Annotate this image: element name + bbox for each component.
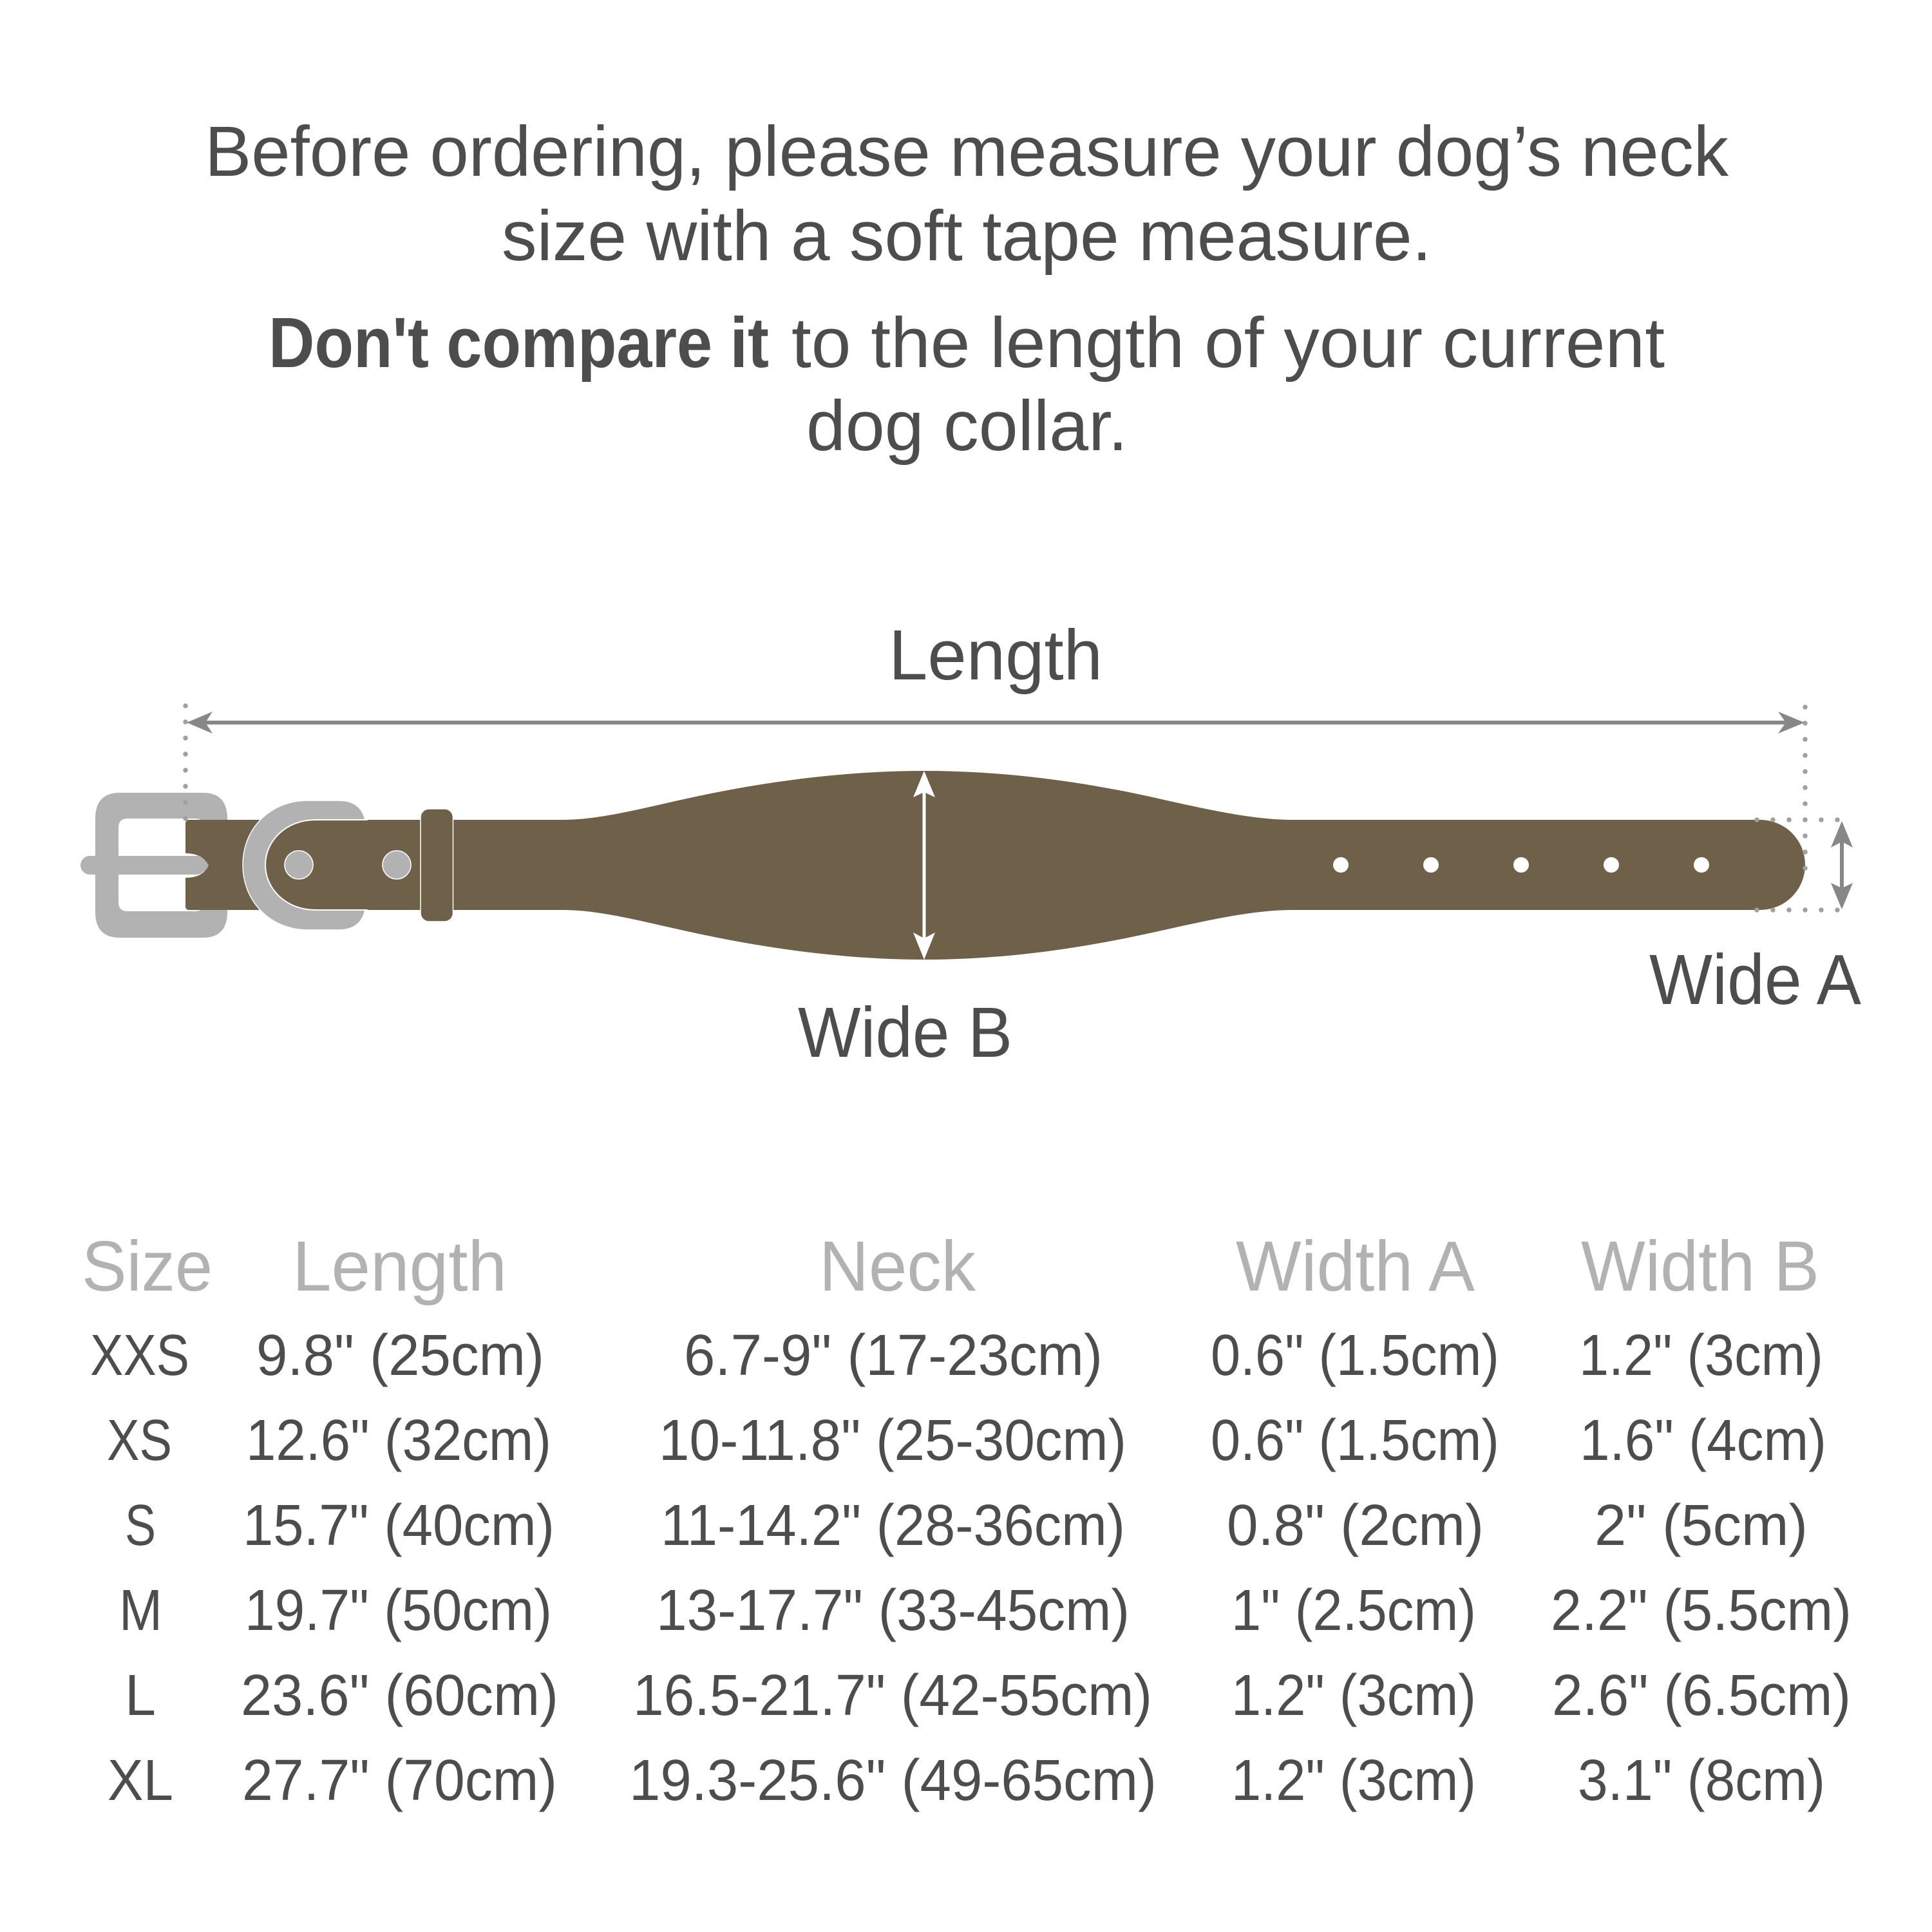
row S: 15.7" (40cm)	[243, 1493, 554, 1558]
row L: 1.2" (3cm)	[1231, 1663, 1476, 1728]
strap fold over ring	[265, 820, 367, 910]
row XXS: XXS	[90, 1323, 189, 1388]
icon: buckle frame	[95, 793, 227, 938]
header: size: Size	[82, 1227, 213, 1306]
header: width B: Width B	[1581, 1227, 1819, 1306]
row L	[125, 1663, 1851, 1728]
row XL: 27.7" (70cm)	[242, 1748, 557, 1813]
row XS: 10-11.8" (25-30cm)	[659, 1408, 1126, 1473]
header: width A: Width A	[1236, 1227, 1475, 1306]
table header row	[82, 1227, 1819, 1306]
row M	[119, 1578, 1852, 1643]
icon: rivet 1	[285, 851, 313, 879]
arrow: wide A	[1831, 821, 1853, 909]
row XXS: 6.7-9" (17-23cm)	[684, 1323, 1103, 1388]
row M: 13-17.7" (33-45cm)	[656, 1578, 1130, 1643]
row XL: 19.3-25.6" (49-65cm)	[629, 1748, 1157, 1813]
row XS: 0.6" (1.5cm)	[1211, 1408, 1499, 1473]
row M: M	[119, 1578, 162, 1643]
left dotted guide	[183, 706, 188, 819]
row M: 19.7" (50cm)	[245, 1578, 552, 1643]
row XXS	[90, 1323, 1823, 1388]
icon: D-ring	[243, 800, 365, 930]
right dotted guides	[1757, 707, 1839, 910]
row S: 2" (5cm)	[1595, 1493, 1808, 1558]
row L: 2.6" (6.5cm)	[1552, 1663, 1851, 1728]
header: length: Length	[292, 1227, 507, 1306]
row XL	[108, 1748, 1825, 1813]
row XS: 1.6" (4cm)	[1580, 1408, 1826, 1473]
row XL: 1.2" (3cm)	[1231, 1748, 1476, 1813]
arrow: length	[187, 712, 1804, 734]
instruction line 2: size with a soft tape measure.	[502, 196, 1432, 276]
collar diagram	[80, 616, 1862, 1072]
row L: 16.5-21.7" (42-55cm)	[633, 1663, 1152, 1728]
icon: rivet 2	[383, 851, 411, 879]
header: neck: Neck	[819, 1227, 976, 1306]
adjustment holes	[1333, 857, 1709, 873]
row L: L	[125, 1663, 156, 1728]
row S: 0.8" (2cm)	[1227, 1493, 1484, 1558]
row XL: 3.1" (8cm)	[1578, 1748, 1825, 1813]
warning continuation: to the length of your current	[791, 303, 1665, 383]
row S: S	[125, 1493, 156, 1558]
row XL: XL	[108, 1748, 173, 1813]
row S	[125, 1493, 1808, 1558]
row L: 23.6" (60cm)	[241, 1663, 558, 1728]
bold warning: Don't compare it	[269, 303, 769, 383]
row M: 1" (2.5cm)	[1231, 1578, 1476, 1643]
row XS: 12.6" (32cm)	[246, 1408, 551, 1473]
collar strap	[185, 771, 1805, 960]
row XS	[107, 1408, 1826, 1473]
strap fold fill	[319, 820, 422, 909]
heading text block	[205, 112, 1729, 466]
icon: keeper loop	[421, 809, 453, 922]
row XXS: 9.8" (25cm)	[256, 1323, 544, 1388]
label: length: Length	[889, 616, 1103, 695]
row XXS: 1.2" (3cm)	[1579, 1323, 1823, 1388]
label: wide A: Wide A	[1649, 940, 1862, 1019]
icon: buckle pin	[80, 856, 206, 875]
row XS: XS	[107, 1408, 172, 1473]
instruction line 1: Before ordering, please measure your dog’s neck	[205, 112, 1729, 191]
row M: 2.2" (5.5cm)	[1551, 1578, 1852, 1643]
size table	[82, 1227, 1852, 1813]
row S: 11-14.2" (28-36cm)	[661, 1493, 1125, 1558]
row XXS: 0.6" (1.5cm)	[1211, 1323, 1499, 1388]
warning line 2: dog collar.	[806, 386, 1128, 466]
arrow: wide B	[913, 771, 935, 960]
label: wide B: Wide B	[798, 993, 1012, 1072]
